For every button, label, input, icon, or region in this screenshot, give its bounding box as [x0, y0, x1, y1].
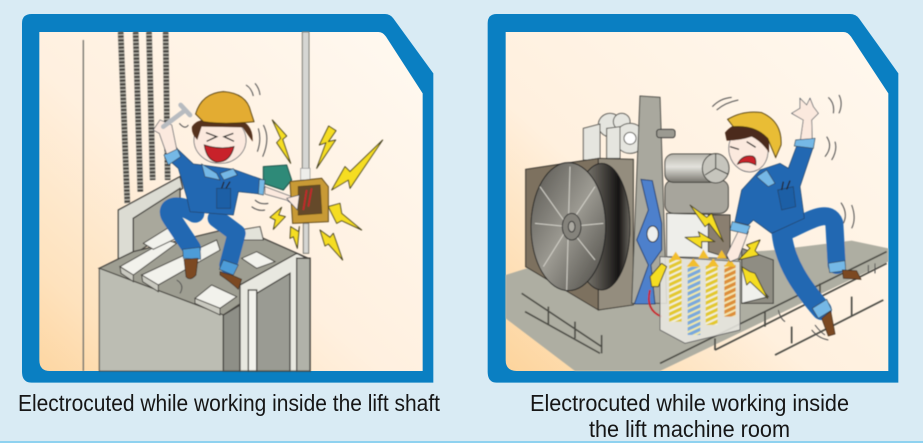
hard hat	[196, 92, 254, 123]
motion lines	[712, 95, 875, 340]
caption: machine room: the lift machine room	[589, 416, 790, 442]
worker boots	[184, 258, 242, 289]
worker lowered arm and hand	[727, 230, 748, 262]
worker mouth	[738, 156, 756, 165]
caption: machine room: Electrocuted while working inside	[530, 390, 849, 416]
fan disc	[531, 163, 606, 291]
worker pocket and pens	[217, 182, 231, 208]
panel frame	[488, 14, 898, 383]
lightning bolts	[270, 120, 383, 260]
white blocks on car roof	[120, 227, 275, 315]
worker trouser cuffs	[183, 247, 238, 275]
fan housing	[526, 158, 633, 310]
blue bracket	[634, 179, 662, 304]
caption: machine room	[530, 390, 849, 442]
worker cuffs and collar	[164, 148, 265, 195]
panel: machine room	[488, 14, 898, 383]
worker cuffs and collar	[730, 138, 815, 234]
worker torso	[165, 148, 263, 215]
panel background	[506, 32, 888, 371]
drum	[573, 163, 630, 290]
hoist ropes	[121, 32, 168, 203]
wrench	[163, 105, 190, 127]
worker head	[724, 124, 773, 176]
worker right arm	[265, 187, 300, 208]
lightning bolts	[650, 205, 768, 298]
worker legs	[782, 216, 837, 310]
worker legs	[169, 207, 237, 265]
car crosshead frame	[118, 177, 183, 260]
machine boxes	[667, 213, 773, 303]
worker eyes	[730, 142, 756, 149]
worker mouth	[204, 145, 234, 162]
illustration: machine room and worker	[506, 95, 888, 371]
worker raised arm and hand	[792, 98, 818, 143]
panel frame	[22, 14, 433, 383]
hand on box	[287, 195, 299, 210]
fan spokes and hub	[535, 167, 603, 290]
worker hair	[192, 120, 253, 142]
worker boots	[822, 270, 861, 336]
car top face	[99, 227, 308, 315]
motion lines	[177, 83, 268, 293]
car front face	[99, 268, 223, 371]
floor beams	[522, 252, 887, 363]
worker torso	[735, 142, 813, 233]
worker closed eyes	[206, 133, 234, 141]
car right side and door frame	[223, 253, 310, 371]
worker pocket and pens	[778, 181, 796, 210]
worker raised arm and hand	[153, 120, 177, 154]
column pin	[657, 129, 675, 138]
rear white machinery	[583, 113, 645, 160]
exposed cables	[649, 290, 662, 317]
floor platform	[506, 241, 888, 371]
electrical conduit	[301, 32, 310, 253]
battery with coils	[660, 249, 740, 343]
upright column	[632, 96, 667, 303]
motor	[665, 154, 729, 213]
green junction cover	[263, 165, 292, 190]
hard hat	[728, 112, 781, 157]
junction box	[290, 178, 328, 223]
panel: lift shaft	[22, 14, 433, 383]
worker hair	[725, 122, 769, 153]
bottom edge band	[0, 441, 923, 443]
panel background	[39, 32, 423, 371]
worker head	[194, 117, 246, 163]
illustration: lift car and worker	[83, 32, 383, 371]
shaft wall line	[81, 40, 85, 371]
worker trouser cuffs	[812, 261, 846, 318]
caption: lift shaft: Electrocuted while working inside the lift shaft	[18, 390, 441, 416]
